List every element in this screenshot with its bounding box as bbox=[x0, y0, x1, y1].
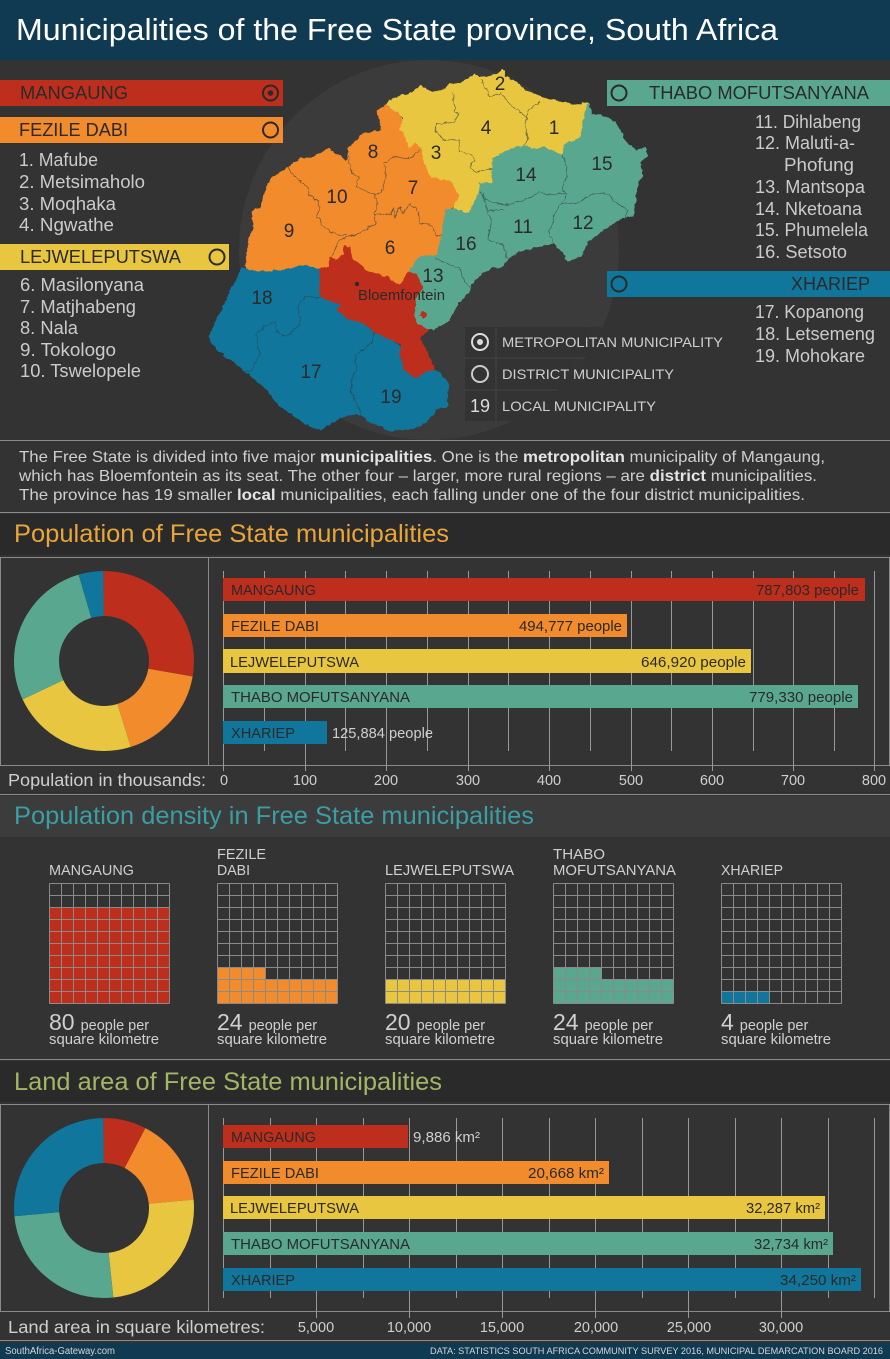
list: Thabo Mofutsanyana municipalities: 16. Setsoto bbox=[755, 241, 847, 262]
density grid: Fezile Dabi: DABI bbox=[217, 863, 250, 879]
list: Thabo Mofutsanyana municipalities: 11. Dihlabeng bbox=[755, 111, 861, 132]
introductory text bbox=[0, 440, 890, 512]
footer: SouthAfrica-Gateway.com bbox=[5, 1346, 115, 1357]
land area bar chart: FEZILE DABI bbox=[231, 1166, 319, 1182]
population bar chart bbox=[223, 571, 874, 771]
population bar chart: 494,777 people bbox=[519, 619, 622, 635]
density grid: Xhariep: square kilometre bbox=[721, 1032, 831, 1048]
density grid: Mangaung: square kilometre bbox=[49, 1032, 159, 1048]
land area axis: 15,000 bbox=[480, 1320, 524, 1336]
population axis: 200 bbox=[374, 773, 398, 789]
list: Xhariep municipalities: 19. Mohokare bbox=[755, 345, 865, 366]
land area bar chart: 20,668 km² bbox=[528, 1166, 604, 1182]
panel: land area bbox=[0, 1104, 890, 1318]
land area bar chart: 9,886 km² bbox=[413, 1130, 480, 1146]
density grid: Thabo Mofutsanyana: square kilometre bbox=[553, 1032, 663, 1048]
header: Xhariep bbox=[607, 271, 890, 297]
density grid: Xhariep bbox=[721, 863, 842, 1048]
municipality numbers: 4 bbox=[481, 118, 492, 139]
footer bbox=[0, 1343, 890, 1359]
municipality numbers: 2 bbox=[495, 74, 505, 95]
header: Fezile Dabi bbox=[0, 117, 283, 143]
population bar chart: 125,884 people bbox=[332, 726, 433, 742]
land area bar chart: THABO MOFUTSANYANA bbox=[231, 1237, 410, 1253]
heading: population density bbox=[0, 796, 890, 837]
region: Mangaung bbox=[319, 246, 435, 378]
list: Fezile Dabi municipalities: 3. Moqhaka bbox=[19, 193, 117, 214]
density grid: Lejweleputswa: 20 people per bbox=[385, 1009, 485, 1035]
list: Lejweleputswa municipalities bbox=[20, 274, 145, 381]
heading: population density: Population density in Free State municipalities bbox=[14, 802, 534, 830]
map background circle bbox=[239, 60, 619, 440]
land area bar chart: 32,734 km² bbox=[754, 1237, 828, 1253]
density grid: Fezile Dabi bbox=[217, 847, 338, 1048]
land area bar chart: XHARIEP bbox=[231, 1273, 295, 1289]
municipality numbers: 11 bbox=[513, 217, 533, 238]
density grid: Thabo Mofutsanyana bbox=[553, 847, 676, 1048]
municipality numbers: 14 bbox=[515, 165, 537, 186]
land area bar chart bbox=[223, 1118, 874, 1318]
land area bar chart: 32,287 km² bbox=[746, 1201, 820, 1217]
header: Xhariep: XHARIEP bbox=[791, 274, 870, 294]
municipality numbers: 1 bbox=[549, 118, 559, 139]
list: Xhariep municipalities bbox=[755, 301, 875, 366]
municipality numbers: 13 bbox=[422, 266, 444, 287]
heading: population bbox=[0, 514, 890, 555]
list: Xhariep municipalities: 18. Letsemeng bbox=[755, 323, 875, 344]
population bar chart: LEJWELEPUTSWA bbox=[230, 655, 359, 671]
population axis: 800 bbox=[862, 773, 886, 789]
list: Thabo Mofutsanyana municipalities bbox=[755, 111, 869, 262]
heading: land area: Land area of Free State municipalities bbox=[14, 1068, 442, 1096]
map of Free State municipalities bbox=[208, 69, 648, 432]
land area axis: Land area in square kilometres: bbox=[8, 1317, 265, 1337]
population axis: 100 bbox=[293, 773, 317, 789]
title: Municipalities of the Free State province, South Africa bbox=[16, 12, 779, 47]
introductory text: The Free State is divided into five major municipalities . One is the metropolitan municipality of Mangaung, bbox=[19, 449, 825, 466]
municipality numbers: 6 bbox=[385, 238, 395, 259]
list: Thabo Mofutsanyana municipalities: 14. Nketoana bbox=[755, 198, 863, 219]
local municipality boundaries bbox=[245, 80, 628, 420]
density grid: Xhariep: 4 people per bbox=[721, 1009, 808, 1035]
header: Mangaung bbox=[0, 80, 283, 106]
header: Mangaung: MANGAUNG bbox=[20, 83, 128, 103]
density grid: Fezile Dabi: FEZILE bbox=[217, 847, 266, 863]
header: Fezile Dabi: FEZILE DABI bbox=[19, 120, 128, 140]
list: Fezile Dabi municipalities: 4. Ngwathe bbox=[19, 214, 114, 235]
population bar chart: THABO MOFUTSANYANA bbox=[231, 690, 410, 706]
land area axis: 5,000 bbox=[298, 1320, 334, 1336]
title bbox=[0, 0, 890, 60]
population axis: 300 bbox=[456, 773, 480, 789]
map legend bbox=[465, 327, 724, 421]
density grid: Xhariep: XHARIEP bbox=[721, 863, 783, 879]
population axis: 600 bbox=[700, 773, 724, 789]
population axis: 0 bbox=[220, 773, 228, 789]
list: Thabo Mofutsanyana municipalities: 12. Maluti-a- bbox=[755, 132, 855, 153]
list: Lejweleputswa municipalities: 7. Matjhabeng bbox=[20, 296, 136, 317]
population donut chart bbox=[36, 594, 172, 728]
header: Lejweleputswa: LEJWELEPUTSWA bbox=[20, 247, 181, 267]
population axis: 400 bbox=[537, 773, 561, 789]
list: Lejweleputswa municipalities: 6. Masilonyana bbox=[20, 274, 145, 295]
population bar chart: FEZILE DABI bbox=[231, 619, 319, 635]
municipality numbers: 18 bbox=[251, 288, 273, 309]
panel: population bbox=[0, 557, 890, 771]
introductory text: The province has 19 smaller local municipalities, each falling under one of the four district municipalities. bbox=[19, 487, 805, 504]
population bar chart: MANGAUNG bbox=[231, 583, 316, 599]
list: Thabo Mofutsanyana municipalities: 13. Mantsopa bbox=[755, 176, 866, 197]
municipality numbers: 9 bbox=[284, 221, 294, 242]
municipality numbers bbox=[251, 74, 613, 408]
population axis: 700 bbox=[781, 773, 805, 789]
list: Lejweleputswa municipalities: 8. Nala bbox=[20, 317, 79, 338]
municipality numbers: 8 bbox=[368, 142, 378, 163]
density grid: Thabo Mofutsanyana: 24 people per bbox=[553, 1009, 653, 1035]
municipality numbers: 17 bbox=[300, 362, 322, 383]
density grid: Lejweleputswa bbox=[385, 863, 514, 1048]
land area axis: 20,000 bbox=[574, 1320, 618, 1336]
municipality numbers: 3 bbox=[431, 143, 441, 164]
land area axis: 25,000 bbox=[667, 1320, 711, 1336]
density grid: Mangaung: MANGAUNG bbox=[49, 863, 134, 879]
map legend: METROPOLITAN MUNICIPALITY bbox=[502, 334, 724, 350]
density grid: Lejweleputswa: square kilometre bbox=[385, 1032, 495, 1048]
list: Xhariep municipalities: 17. Kopanong bbox=[755, 301, 864, 322]
city label: Bloemfontein: Bloemfontein bbox=[358, 288, 445, 304]
header: Thabo Mofutsanyana: THABO MOFUTSANYANA bbox=[649, 83, 869, 103]
density grid: Thabo Mofutsanyana: MOFUTSANYANA bbox=[553, 863, 676, 879]
municipality numbers: 19 bbox=[380, 387, 402, 408]
density grid: Thabo Mofutsanyana: THABO bbox=[553, 847, 605, 863]
list: Fezile Dabi municipalities: 1. Mafube bbox=[19, 149, 98, 170]
region: Fezile Dabi bbox=[386, 69, 588, 215]
map legend: LOCAL MUNICIPALITY bbox=[502, 398, 657, 414]
land area axis bbox=[0, 1317, 890, 1340]
list: Fezile Dabi municipalities: 2. Metsimaholo bbox=[19, 171, 145, 192]
density grid: Mangaung: 80 people per bbox=[49, 1009, 149, 1035]
region: Xhariep bbox=[208, 265, 450, 432]
population bar chart: XHARIEP bbox=[231, 726, 295, 742]
region: Thabo Mofutsanyana bbox=[408, 102, 648, 330]
population bar chart: 779,330 people bbox=[749, 690, 853, 706]
density grid: Lejweleputswa: LEJWELEPUTSWA bbox=[385, 863, 514, 879]
list: Fezile Dabi municipalities bbox=[19, 149, 145, 235]
municipality numbers: 15 bbox=[591, 154, 613, 175]
land area donut chart bbox=[36, 1140, 172, 1276]
land area axis: 30,000 bbox=[759, 1320, 803, 1336]
population axis: Population in thousands: bbox=[8, 770, 206, 790]
heading: land area bbox=[0, 1060, 890, 1102]
list: Thabo Mofutsanyana municipalities: 15. Phumelela bbox=[755, 219, 869, 240]
list: Lejweleputswa municipalities: 9. Tokologo bbox=[20, 339, 116, 360]
municipality numbers: 10 bbox=[326, 187, 348, 208]
population bar chart: 787,803 people bbox=[756, 583, 859, 599]
density grid: Mangaung bbox=[49, 863, 170, 1048]
map legend: DISTRICT MUNICIPALITY bbox=[502, 366, 675, 382]
list: Lejweleputswa municipalities: 10. Tswelopele bbox=[20, 360, 141, 381]
municipality numbers: 7 bbox=[408, 178, 418, 199]
municipality numbers: 12 bbox=[572, 213, 594, 234]
header: Thabo Mofutsanyana bbox=[607, 80, 890, 106]
city label: Bloemfontein bbox=[355, 282, 445, 304]
list: Thabo Mofutsanyana municipalities: Phofung bbox=[784, 154, 854, 175]
land area bar chart: MANGAUNG bbox=[231, 1130, 316, 1146]
population axis: 500 bbox=[619, 773, 643, 789]
density grid: Fezile Dabi: 24 people per bbox=[217, 1009, 317, 1035]
region: Lejweleputswa bbox=[245, 105, 467, 290]
header: Lejweleputswa bbox=[0, 244, 229, 270]
municipality numbers: 16 bbox=[455, 234, 477, 255]
footer: DATA: STATISTICS SOUTH AFRICA COMMUNITY SURVEY 2016, MUNICIPAL DEMARCATION BOARD 2016 bbox=[430, 1346, 883, 1357]
heading: population: Population of Free State municipalities bbox=[14, 520, 449, 548]
land area axis: 10,000 bbox=[387, 1320, 431, 1336]
population axis bbox=[0, 770, 890, 794]
map legend: 19 bbox=[470, 396, 490, 416]
introductory text: which has Bloemfontein as its seat. The other four – larger, more rural regions – are district municipalities. bbox=[18, 468, 817, 485]
density grid: Fezile Dabi: square kilometre bbox=[217, 1032, 327, 1048]
population bar chart: 646,920 people bbox=[641, 655, 746, 671]
land area bar chart: LEJWELEPUTSWA bbox=[230, 1201, 359, 1217]
land area bar chart: 34,250 km² bbox=[780, 1273, 856, 1289]
